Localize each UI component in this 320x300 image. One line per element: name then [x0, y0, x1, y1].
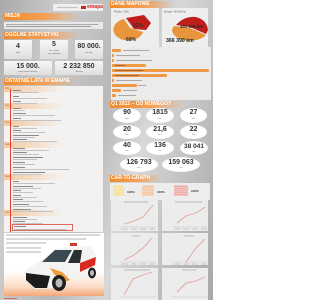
heading: map data: DANE MAPOWE — [111, 1, 150, 7]
stat card 80 000: 80 000. — [77, 43, 101, 50]
stat card 4 — [4, 40, 32, 59]
oval 136: km — [159, 150, 161, 152]
swatch pink — [174, 185, 188, 196]
heading: statistics: OGÓLNE STATYSTYKI — [5, 32, 58, 38]
heading: car to graph — [110, 175, 161, 182]
stat card 5: 5 — [52, 41, 56, 48]
year band 2012 — [4, 86, 64, 92]
stat card 15 000 — [4, 61, 52, 75]
oval 27: km — [192, 118, 195, 120]
oval 22 — [180, 125, 207, 139]
van panel — [4, 233, 104, 296]
legend panel — [110, 183, 210, 200]
year band 2008 — [4, 174, 64, 180]
oval 136: 136 — [154, 142, 166, 149]
stat card 80 000: km dróg — [85, 52, 93, 54]
stat card 5: lat na rynku — [49, 50, 59, 52]
year band 2010 — [4, 120, 64, 126]
oval 90: mln — [125, 118, 129, 120]
oval 159 063: km — [180, 167, 182, 169]
oval 159 063: 159 063 — [168, 159, 194, 166]
stat card 15 000: 15 000. — [16, 63, 40, 70]
year band 2011: 2011 — [5, 105, 10, 107]
pie card 1: Polska - 20% — [114, 10, 130, 14]
stat card 5 — [40, 40, 68, 59]
oval 27 — [180, 108, 207, 123]
stat card 4: 4 — [16, 43, 20, 50]
logo bar: emapa — [87, 4, 103, 10]
heading: misja: MISJA — [5, 13, 20, 19]
year band 2012: 2012 — [5, 88, 10, 90]
van — [25, 243, 96, 291]
oval 40: km — [126, 150, 128, 152]
pie card 2: Europa - 86 000 km — [164, 10, 186, 14]
oval 1815: km — [159, 118, 161, 120]
oval 21,6 — [146, 125, 174, 139]
swatch peach — [142, 185, 154, 196]
oval 20: km — [126, 134, 128, 136]
stat card 5: map cyfrowych — [47, 52, 61, 54]
bar labels — [123, 50, 149, 51]
pie card 2: 461 475 km — [180, 24, 204, 29]
year band 2007 — [4, 210, 64, 216]
heading: Q1 2012: Q1 2012 – CO NOWEGO? — [111, 101, 171, 107]
oval 90: 90 — [123, 109, 131, 116]
oval 40 — [113, 141, 141, 155]
oval 126 793: km — [138, 167, 140, 169]
stat card 2 232 850: adresów — [75, 71, 83, 73]
year band 2009 — [4, 142, 64, 148]
highlighted entry — [12, 224, 73, 231]
line charts — [111, 200, 208, 300]
oval 20 — [113, 125, 141, 139]
pie chart: roads — [113, 15, 151, 41]
stat card 2 232 850 — [55, 61, 103, 75]
year band 2010: 2010 — [5, 122, 10, 124]
oval 1815 — [146, 108, 174, 123]
oval 38 041 — [180, 141, 208, 155]
footer marks — [4, 298, 17, 299]
oval 20: 20 — [123, 126, 131, 133]
pie card 2: 366 390 km — [166, 38, 194, 44]
timeline entries — [13, 90, 69, 224]
stat card 80 000 — [75, 40, 103, 59]
oval 21,6: km — [159, 134, 161, 136]
oval 21,6: 21,6 — [153, 126, 167, 133]
oval 90 — [113, 108, 141, 123]
oval 38 041: km — [193, 150, 195, 152]
pie card 2 — [162, 8, 208, 47]
oval 136 — [146, 141, 174, 155]
pie chart: area — [172, 17, 208, 41]
legend panel: 100% — [191, 189, 199, 193]
oval 126 793: 126 793 — [126, 159, 152, 166]
oval 27: 27 — [190, 109, 197, 116]
year band 2009: 2009 — [5, 144, 10, 146]
heading: car to graph: CAR-TO-GRAPH — [111, 175, 150, 181]
year band 2011 — [4, 103, 64, 109]
stat card 4: kraje — [16, 52, 20, 54]
oval 1815: 1815 — [152, 109, 168, 116]
timeline axis — [10, 89, 11, 232]
year band 2007: 2007 — [5, 212, 10, 214]
oval 38 041: 38 041 — [184, 143, 204, 150]
pie card 1: 32% — [133, 23, 144, 29]
pie card 1 — [111, 8, 159, 47]
stat card 15 000: miejscowości w bazie — [18, 71, 38, 73]
oval 126 793 — [120, 157, 158, 172]
bar chart panel — [111, 47, 211, 100]
heading: statistics — [4, 32, 80, 39]
logo bar — [53, 4, 103, 11]
pie card 1: 68% — [126, 37, 137, 43]
oval 22: km — [192, 134, 195, 136]
heading: recent years: OSTATNIE LATA W EMAPIE — [5, 78, 70, 84]
timeline panel — [4, 86, 103, 232]
oval 22: 22 — [190, 126, 197, 133]
oval 159 063 — [162, 157, 200, 172]
heading: misja — [4, 13, 80, 20]
percent labels: 100% — [127, 190, 135, 194]
oval 40: 40 — [123, 142, 131, 149]
bars — [112, 48, 121, 52]
year band 2008: 2008 — [5, 176, 10, 178]
swatch yellow — [113, 185, 124, 196]
mission text — [4, 22, 103, 29]
heading: map data — [110, 1, 173, 8]
stat card 2 232 850: 2 232 850 — [63, 63, 95, 70]
legend panel: 100% — [157, 190, 165, 194]
